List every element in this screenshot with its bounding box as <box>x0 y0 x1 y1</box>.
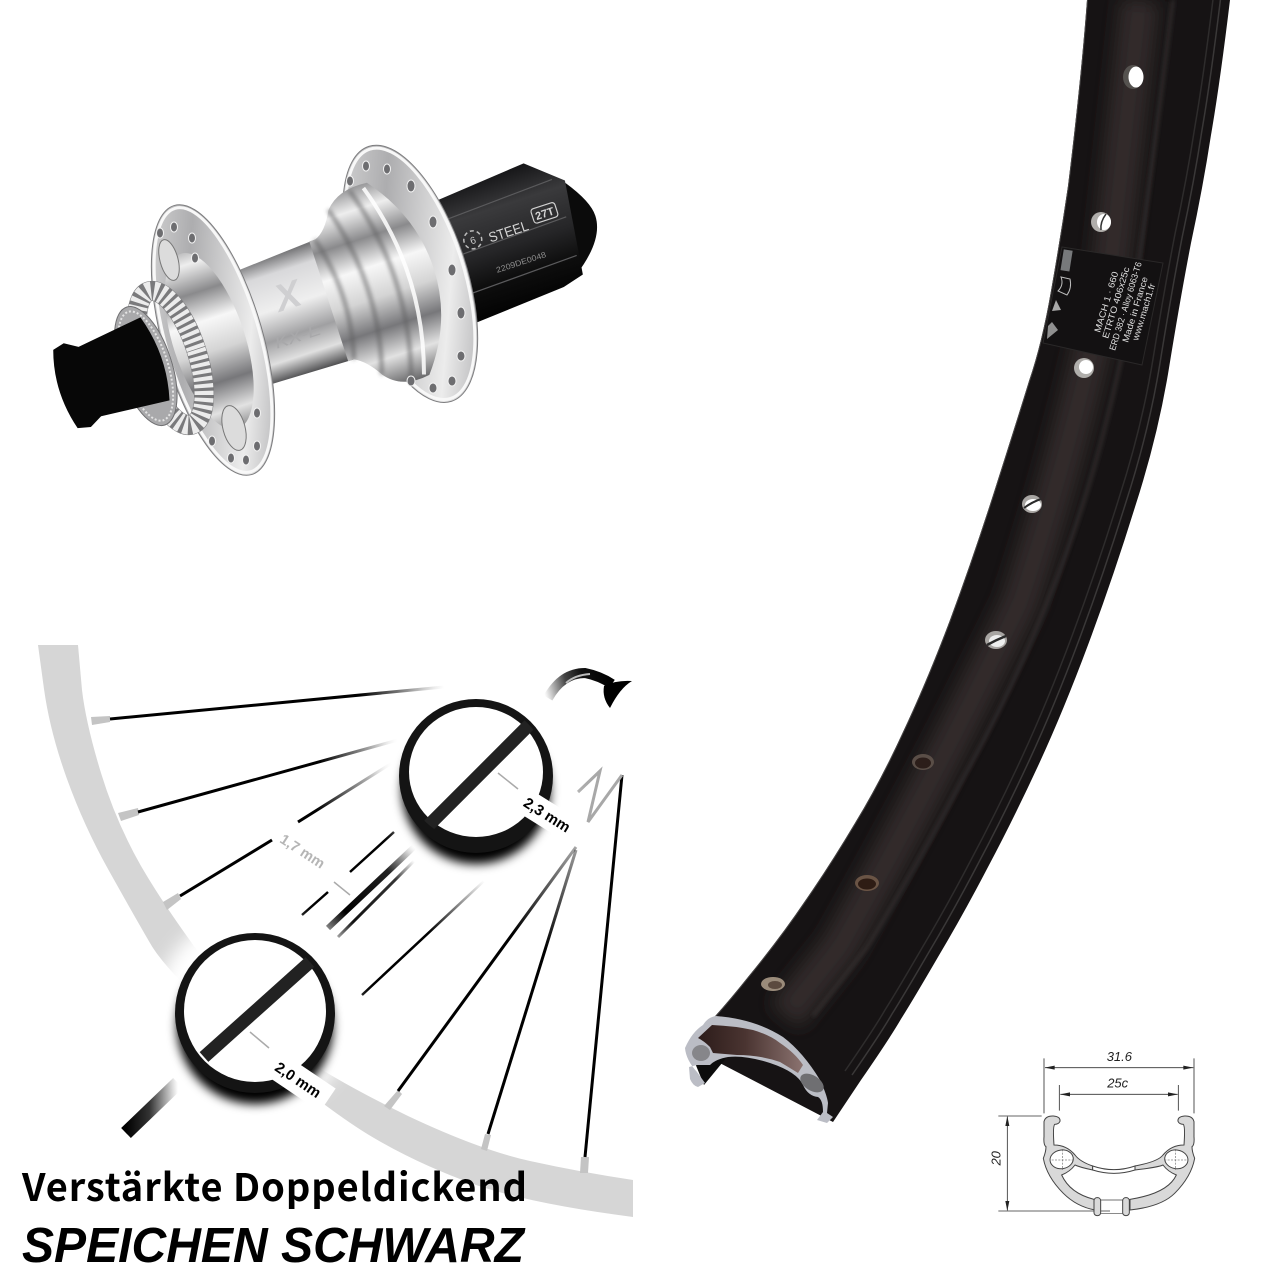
threaded lock ring <box>102 299 190 433</box>
rim cut end profile <box>685 1016 833 1123</box>
rim sticker <box>1043 247 1163 365</box>
freehub serial number: 2209DE0048 <box>495 250 548 275</box>
label 2,0 mm <box>260 1048 336 1112</box>
label 2,3 mm <box>511 786 583 844</box>
hub photo: silver rear hub with black freehub <box>15 81 639 525</box>
title line one: Verstärkte Doppeldickend <box>21 1157 527 1212</box>
sticker text: MACH 1 · 660 <box>1092 270 1120 334</box>
label 2,3 mm: 2,3 mm <box>520 795 573 836</box>
dimension lines <box>998 1058 1194 1211</box>
rim photo: black aluminium rim segment <box>685 0 1230 1123</box>
spoke hole 8 <box>761 977 785 991</box>
spokes <box>110 687 622 1157</box>
spoke hole 6 <box>912 754 934 770</box>
dimension values: 31.6 <box>1107 1049 1133 1064</box>
bent spoke elbow with head <box>548 673 632 708</box>
freehub cassette body <box>419 153 599 329</box>
hub logo X: X <box>268 272 309 321</box>
freehub text STEEL: STEEL <box>486 217 531 245</box>
label 1,7 mm: 1,7 mm <box>277 832 327 872</box>
spoke gauge tick 1,7 mm <box>334 882 350 895</box>
spoke hole 4 <box>1022 495 1042 513</box>
dimension arrows <box>1005 1066 1193 1211</box>
dimension values <box>989 1049 1133 1167</box>
profile left half <box>1043 1116 1095 1210</box>
bell and neck of hub shell <box>219 171 465 424</box>
sticker text: ERD 382 · Alloy 6063-T6 <box>1107 261 1144 352</box>
right flange <box>316 129 505 419</box>
left flange <box>117 188 309 492</box>
rim body <box>687 0 1230 1122</box>
profile right half <box>1130 1116 1195 1210</box>
grey rim arc <box>38 645 633 1217</box>
sticker text: www.mach1.fr <box>1130 282 1157 343</box>
dimension values: 20 <box>989 1150 1004 1167</box>
dimension values: 25c <box>1106 1076 1129 1091</box>
right axle end <box>533 170 611 279</box>
left axle end <box>46 315 175 433</box>
spoke hole 3 <box>1074 358 1094 378</box>
freehub badge 27T: 27T <box>534 206 556 223</box>
toothed centerlock ring <box>123 283 218 433</box>
hub flange spoke holes <box>155 161 465 465</box>
rim cross-section technical drawing <box>989 1049 1195 1216</box>
title line two: SPEICHEN SCHWARZ <box>22 1219 526 1273</box>
spoke hole 5 <box>985 631 1007 649</box>
magnifier circle lower <box>155 912 355 1112</box>
spoke hole 7 <box>855 875 879 891</box>
freehub 6 mark <box>461 228 484 251</box>
spoke hole 2 <box>1091 212 1111 232</box>
spoke nipples <box>91 716 589 1173</box>
threaded spoke stub <box>126 1083 178 1133</box>
valve bridge and eyelets <box>1094 1198 1129 1216</box>
profile centre well <box>1093 1166 1135 1173</box>
left flange cone <box>147 243 272 440</box>
sticker text: Made in France <box>1120 276 1150 344</box>
sticker text: ETRTO 406x25c <box>1100 265 1132 340</box>
freehub 6 mark: 6 <box>469 235 478 247</box>
label 2,0 mm: 2,0 mm <box>272 1059 324 1102</box>
spoke hole 1 <box>1123 65 1144 89</box>
spoke diagram <box>38 645 633 1217</box>
rim shading bands <box>687 0 1221 1075</box>
sticker icons <box>1047 249 1073 339</box>
hub lettering: KX-E <box>272 319 324 353</box>
magnifier circle upper <box>382 682 570 870</box>
sticker text <box>1092 261 1157 352</box>
freehub badge 27T <box>530 202 559 224</box>
